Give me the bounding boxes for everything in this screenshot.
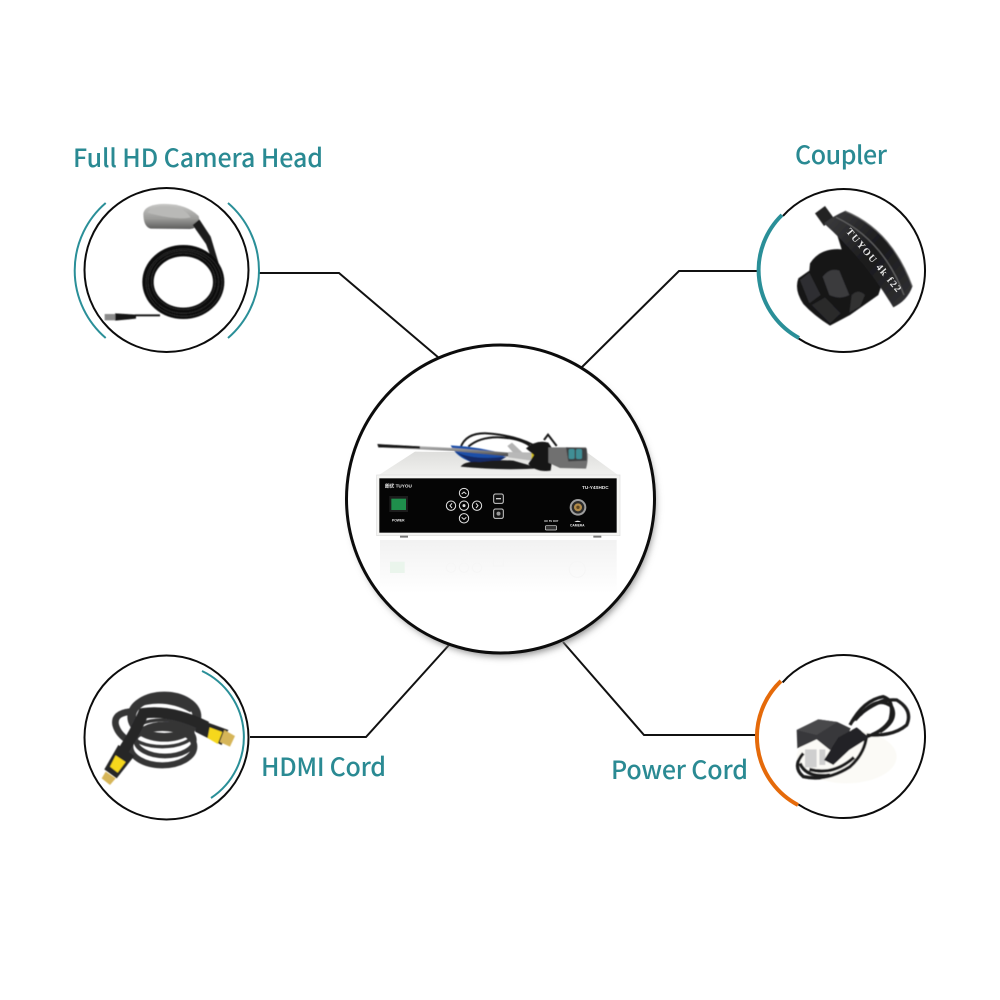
device black panel bbox=[379, 478, 617, 533]
head body bbox=[143, 204, 200, 229]
device front frame bbox=[377, 475, 620, 536]
plug pins bbox=[805, 749, 825, 767]
left connector bbox=[102, 745, 134, 785]
circle background bbox=[762, 655, 925, 818]
plug body bbox=[797, 719, 851, 750]
scope eyepiece bbox=[508, 452, 532, 461]
icon: coupler lens bbox=[797, 206, 912, 326]
USB port bbox=[544, 519, 559, 530]
model text: TU-Y4SHDC bbox=[582, 485, 609, 490]
panel: main unit bbox=[346, 345, 655, 656]
teal arc right bbox=[228, 203, 259, 338]
panel: HDMI cord bbox=[84, 656, 248, 820]
device reflection bbox=[380, 540, 617, 593]
endoscope and camera assembly bbox=[377, 433, 588, 471]
icon: HDMI cable bbox=[102, 696, 235, 785]
heading: Power Cord: Power Cord bbox=[611, 751, 748, 787]
coiled cable bbox=[148, 251, 219, 313]
lens engraving: TUYOU 4k f22 bbox=[843, 227, 904, 296]
neck and strain relief bbox=[193, 219, 221, 271]
scope shaft bbox=[377, 444, 508, 456]
circle outline bbox=[84, 188, 248, 352]
connector: HDMI cord to main unit bbox=[250, 645, 449, 737]
teal arc left bbox=[75, 203, 106, 338]
orange arc bbox=[757, 681, 798, 805]
device illustration bbox=[377, 433, 620, 593]
power switch bbox=[389, 496, 408, 523]
icon: power cord bbox=[797, 697, 909, 783]
cord shadow bbox=[797, 730, 897, 783]
camera head body bbox=[548, 447, 588, 469]
circle outline bbox=[84, 656, 248, 820]
circle background bbox=[762, 189, 925, 352]
teal arc bbox=[759, 215, 799, 338]
cable tail bbox=[135, 312, 160, 318]
tab bbox=[815, 206, 834, 226]
panel: coupler bbox=[759, 189, 925, 352]
USB port: DC 5V OUT bbox=[544, 519, 559, 523]
device top surface bbox=[377, 452, 619, 476]
right connector bbox=[195, 719, 235, 747]
power switch: POWER bbox=[392, 519, 405, 523]
camera socket bbox=[570, 499, 586, 528]
lens ring bbox=[824, 211, 912, 307]
panel: power cord bbox=[757, 655, 925, 818]
cable loops bbox=[461, 433, 557, 447]
coupler on scope bbox=[526, 442, 553, 471]
side buttons bbox=[494, 494, 503, 518]
light post bbox=[507, 443, 524, 457]
IEC connector bbox=[824, 727, 869, 765]
brand text: 朗优 TUYOU bbox=[385, 483, 413, 490]
connector: camera head to main unit bbox=[259, 273, 439, 358]
flat cable crossing bbox=[118, 713, 207, 758]
heading: Coupler: Coupler bbox=[795, 136, 888, 172]
heading: Full HD Camera Head: Full HD Camera Head bbox=[73, 139, 323, 175]
main circle outline bbox=[346, 345, 654, 653]
knob bbox=[797, 233, 883, 326]
device feet bbox=[400, 536, 601, 538]
circle outline bbox=[783, 189, 925, 352]
camera socket: CAMERA bbox=[570, 524, 585, 528]
main circle shadow bbox=[351, 352, 655, 656]
plug bbox=[115, 313, 136, 321]
circle outline bbox=[783, 655, 925, 818]
panel: camera head bbox=[75, 188, 259, 352]
icon: camera head and coiled cable bbox=[105, 204, 222, 321]
teal arc bbox=[202, 671, 244, 798]
cord loops bbox=[797, 697, 909, 778]
cable coils bbox=[115, 696, 197, 765]
connector: coupler to main unit bbox=[580, 271, 759, 369]
connector: power cord to main unit bbox=[563, 642, 758, 735]
navigation buttons bbox=[446, 488, 482, 523]
blue fan bbox=[451, 445, 508, 462]
heading: HDMI Cord: HDMI Cord bbox=[261, 748, 386, 784]
black cable bundle bbox=[461, 460, 540, 469]
